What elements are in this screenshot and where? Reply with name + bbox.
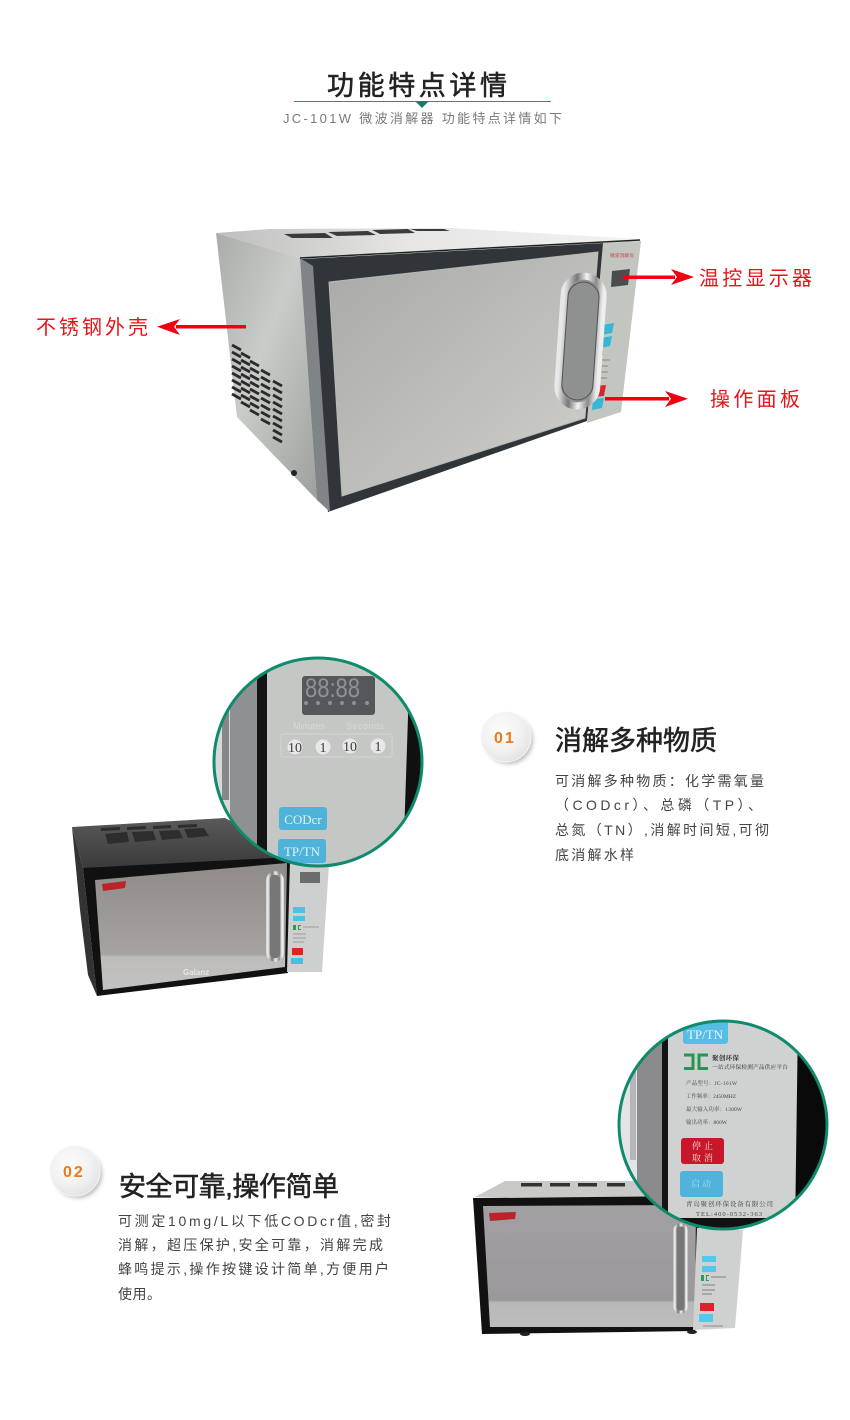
stainless door panel xyxy=(329,252,598,496)
magnifier close-up: product info and keys xyxy=(618,1020,830,1232)
feature 01 description: 底消解水样 xyxy=(555,847,634,863)
title: 功能特点详情 xyxy=(327,71,507,101)
product photo with panel close-up xyxy=(473,1020,830,1336)
stop cancel button xyxy=(681,1138,724,1164)
label: temperature display: 温控显示器 xyxy=(699,267,812,290)
stop cancel button: 停 止 xyxy=(692,1140,713,1151)
time buttons xyxy=(281,734,392,757)
feature 02 badge xyxy=(50,1146,102,1198)
top case xyxy=(216,228,640,258)
label: stainless shell: 不锈钢外壳 xyxy=(36,316,148,339)
product specifications: 工作频率：2450MHZ xyxy=(686,1092,736,1100)
label: control panel: 操作面板 xyxy=(710,388,800,411)
TP/TN button xyxy=(683,1022,728,1044)
top vents xyxy=(284,229,450,238)
side vent slits xyxy=(232,345,282,442)
microwave body xyxy=(473,1181,743,1336)
feature 02 description: 蜂鸣提示,操作按键设计简单,方便用户 xyxy=(118,1261,389,1277)
feature 01 description: 总氮（TN）,消解时间短,可彻 xyxy=(555,822,769,838)
start button xyxy=(680,1171,723,1197)
main product photo: microwave digester xyxy=(216,228,641,512)
time labels xyxy=(294,722,384,729)
company name: 一站式环保检测产品供应平台 xyxy=(712,1063,788,1071)
start button: 启动 xyxy=(691,1178,711,1189)
subtitle: JC-101W 微波消解器 功能特点详情如下 xyxy=(283,111,562,126)
arrow: temperature display xyxy=(623,269,694,285)
control panel: 微波消解仪 xyxy=(610,252,634,259)
feature 01 description: （CODcr）、总磷（TP）、 xyxy=(555,797,762,813)
TP/TN button xyxy=(278,839,326,863)
CODcr button: CODcr xyxy=(284,812,322,827)
time buttons: 1 xyxy=(320,741,326,756)
time labels: Minutes xyxy=(293,721,326,731)
CODcr button xyxy=(279,807,327,830)
product specifications: 最大输入功率：1300W xyxy=(686,1105,743,1113)
feature 02 description xyxy=(118,1213,391,1302)
arrow: stainless shell xyxy=(157,319,246,335)
time buttons: 10 xyxy=(288,741,302,756)
company name xyxy=(712,1054,788,1070)
manufacturer and phone: TEL:400-0532-363 xyxy=(696,1211,762,1218)
TP/TN button: TP/TN xyxy=(687,1027,724,1042)
feature 01 badge: 01 xyxy=(494,730,516,747)
door handle xyxy=(268,873,282,960)
control panel xyxy=(693,1228,743,1330)
feature 01 heading: 消解多种物质 xyxy=(555,726,717,756)
TP/TN button: TP/TN xyxy=(284,844,321,859)
brand text: Galanz xyxy=(183,968,209,977)
stop cancel button: 取 消 xyxy=(692,1152,713,1163)
feature 01 description: 可消解多种物质：化学需氧量 xyxy=(555,773,764,789)
LED display xyxy=(302,673,375,715)
side case xyxy=(216,233,317,500)
arrow: control panel xyxy=(605,391,688,407)
door edge strip xyxy=(300,258,330,512)
product specifications: 输出功率：800W xyxy=(686,1118,728,1126)
feature 01 description xyxy=(555,773,769,863)
chrome door handle xyxy=(556,275,604,407)
LED display: 88:88 xyxy=(305,673,360,703)
brand sticker xyxy=(102,881,126,891)
feature 02 heading: 安全可靠,操作简单 xyxy=(119,1172,339,1202)
time buttons: 1 xyxy=(374,740,382,755)
brand sticker xyxy=(489,1212,516,1221)
product photo with display close-up xyxy=(72,657,423,996)
control panel xyxy=(287,860,329,972)
microwave body xyxy=(72,818,329,996)
manufacturer and phone: 青岛聚创环保设备有限公司 xyxy=(686,1199,773,1208)
feet xyxy=(520,1330,697,1336)
control panel xyxy=(587,241,641,423)
product specifications xyxy=(686,1079,743,1126)
time buttons: 10 xyxy=(343,740,357,755)
feature 02 description: 可测定10mg/L以下低CODcr值,密封 xyxy=(118,1213,391,1229)
title underline with marker xyxy=(294,101,551,108)
feature 01 badge xyxy=(481,712,533,764)
magnifier close-up: display and buttons xyxy=(213,657,423,867)
feature 02 description: 消解，超压保护,安全可靠，消解完成 xyxy=(118,1237,383,1253)
door handle xyxy=(675,1225,686,1312)
door frame xyxy=(302,243,604,512)
company logo xyxy=(684,1055,708,1068)
company name: 聚创环保 xyxy=(712,1053,740,1062)
feature 02 description: 使用。 xyxy=(118,1286,161,1302)
feature 02 badge: 02 xyxy=(63,1164,85,1181)
time labels: Seconds xyxy=(346,721,384,731)
product specifications: 产品型号：JC-101W xyxy=(686,1079,738,1087)
manufacturer and phone xyxy=(686,1200,772,1216)
